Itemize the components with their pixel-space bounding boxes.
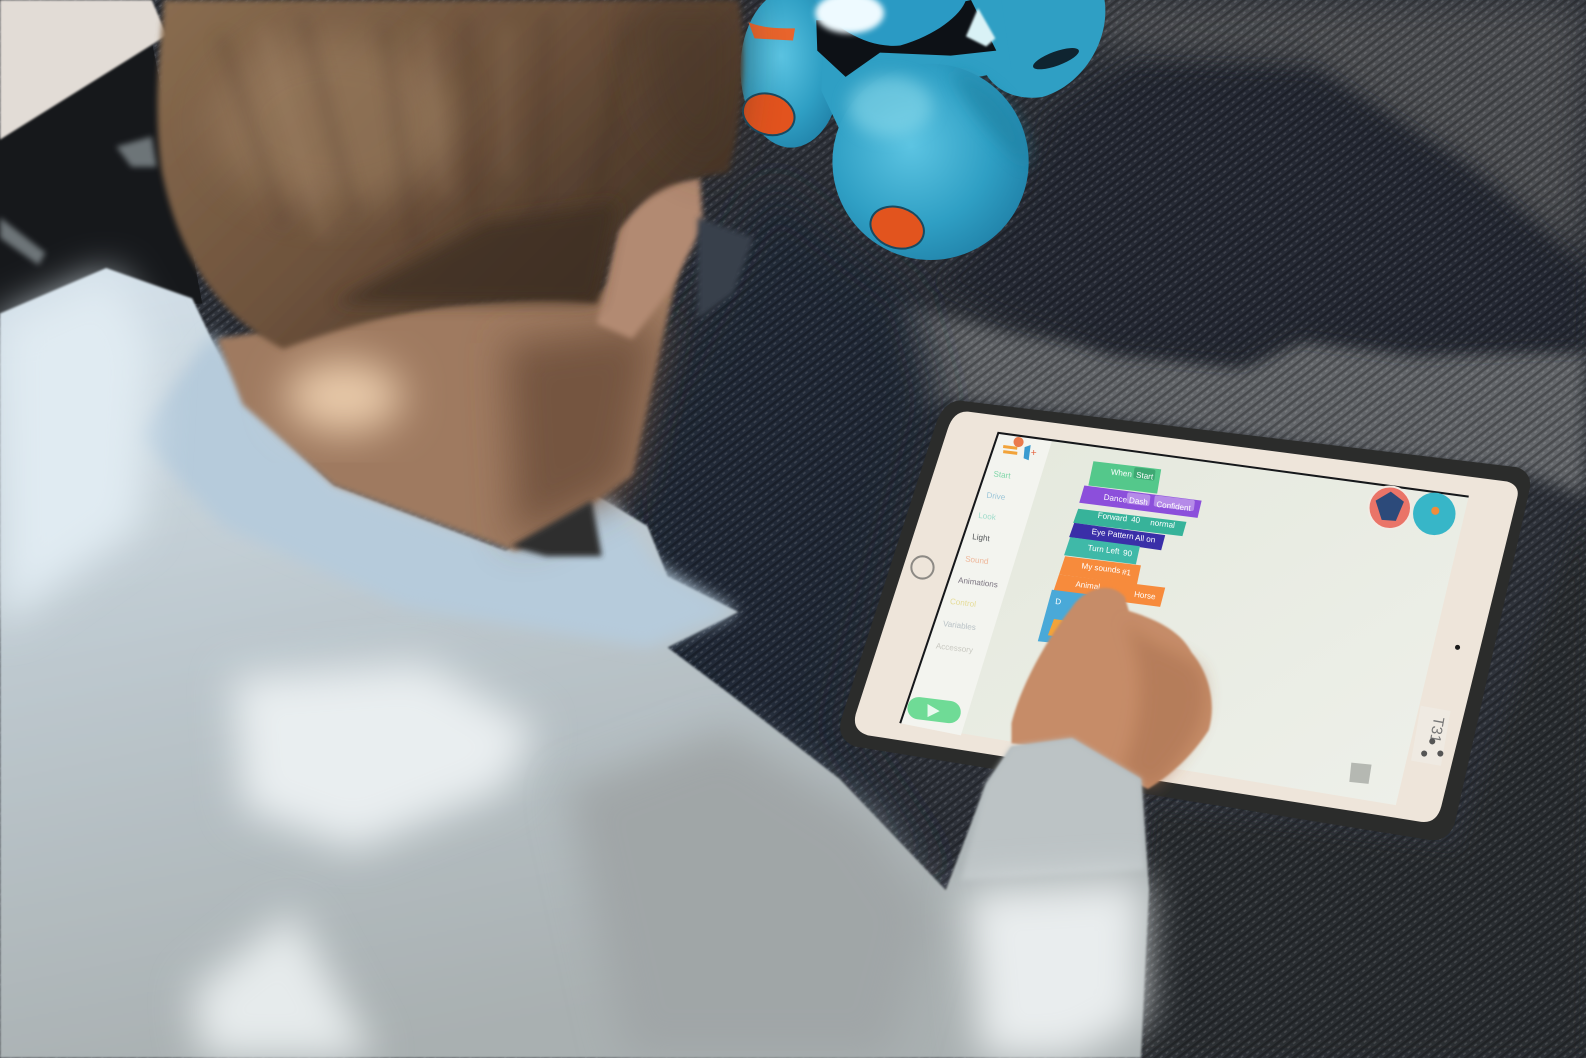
block: Eye Pattern All on: All on (1135, 533, 1156, 545)
block: Forward 40 normal (1073, 509, 1186, 536)
robot front orange button (865, 200, 929, 255)
neck shadow (506, 324, 657, 541)
block: Animal Horse: Animal (1075, 580, 1101, 592)
app sidebar labels: Animations (958, 576, 998, 589)
hair (157, 0, 743, 349)
block: Eye Pattern All on (1069, 523, 1165, 550)
block: Turn Left 90: Turn Left (1087, 543, 1121, 556)
block: Turn Left 90 (1064, 537, 1140, 564)
collar gap (511, 501, 602, 556)
robot dark face plate (816, 0, 996, 77)
robot ball dark side (951, 71, 1028, 167)
tablet camera (1455, 645, 1460, 650)
sleeve white highlight (966, 880, 1143, 1058)
shirt (0, 268, 1149, 1058)
robot left orange button (737, 87, 800, 142)
shirt upper left highlight (0, 273, 152, 627)
app sidebar labels: Drive (986, 491, 1006, 502)
app play button (906, 696, 962, 724)
tablet screen top and left edge (900, 433, 1469, 723)
block: Drive group: D (1055, 597, 1062, 607)
tablet home button (911, 556, 934, 579)
ear (597, 177, 703, 339)
block: Forward 40 normal: normal (1150, 518, 1176, 530)
block: Dance Dash Confident: Dance (1103, 493, 1128, 505)
collar shading (137, 334, 736, 647)
hair right dark (627, 0, 742, 172)
hair dark lower band (334, 202, 617, 303)
tablet sticker logo: T31 (1426, 715, 1447, 744)
app sidebar labels: Accessory (935, 641, 974, 655)
robot avatars (1369, 487, 1456, 535)
neck and ear (217, 177, 754, 556)
robot eye (966, 8, 995, 47)
block: When Start: Start (1136, 470, 1154, 482)
tablet (840, 401, 1530, 840)
app menu icons (1003, 437, 1037, 460)
shirt shaded underside (566, 728, 931, 1058)
shirt body and arm (0, 268, 1149, 1058)
code block stack (1038, 461, 1202, 647)
sleeve upper tone (961, 738, 1145, 880)
robot ball highlight (848, 76, 933, 137)
glasses arm (698, 217, 754, 319)
block: Animal Horse (1053, 575, 1165, 607)
block: Turn Left 90: 90 (1122, 548, 1133, 558)
app sidebar labels: Variables (942, 619, 976, 632)
tablet screen sidebar (900, 433, 1052, 735)
app sidebar labels (935, 469, 1012, 655)
shirt highlight bottom (192, 910, 374, 1058)
hand shading (1123, 617, 1205, 789)
tablet case (840, 401, 1530, 840)
app menu icons: + (1031, 448, 1037, 459)
block: When Start: When (1110, 467, 1132, 479)
block: Dance Dash Confident: Dash (1129, 496, 1148, 507)
block: Forward 40 normal: Forward (1097, 511, 1128, 523)
robot: Dash toy (737, 0, 1105, 260)
robot main front ball (832, 64, 1029, 260)
block: My sounds #1: My sounds (1081, 561, 1121, 575)
block: Dance Dash Confident (1079, 486, 1202, 518)
block: When Start (1088, 461, 1161, 494)
app sidebar labels: Sound (965, 554, 989, 566)
robot slot on rear wheel (1031, 44, 1081, 74)
app sidebar labels: Light (972, 532, 991, 543)
hair strands (223, 20, 627, 243)
robot orange grill (748, 22, 795, 40)
block: Forward 40 normal: 40 (1131, 515, 1141, 525)
shirt highlight on shoulder (233, 663, 536, 850)
tablet bezel (855, 412, 1518, 822)
robot left wheel (740, 0, 842, 148)
robot body (821, 0, 1011, 129)
robot rear right wheel (981, 0, 1105, 98)
boy's hand on tablet (1011, 588, 1212, 789)
tablet sticker logo (1411, 706, 1451, 766)
app sidebar labels: Control (950, 597, 977, 609)
table and paper in top-left corner (0, 0, 202, 314)
robot head light (815, 0, 884, 33)
trash icon (1349, 763, 1372, 784)
app sidebar labels: Start (993, 469, 1012, 481)
block: Dance Dash Confident: Confident (1156, 500, 1192, 513)
neck highlight (285, 360, 403, 433)
block: My sounds #1: #1 (1121, 568, 1132, 578)
block: Eye Pattern All on: Eye Pattern (1091, 527, 1134, 541)
tablet screen (900, 433, 1469, 805)
block: My sounds #1 (1059, 556, 1141, 585)
app sidebar labels: Look (978, 511, 997, 522)
hair highlight (212, 35, 455, 207)
robot head (814, 0, 966, 46)
block: Animal Horse: Horse (1134, 590, 1157, 601)
block: Drive group (1038, 590, 1108, 647)
